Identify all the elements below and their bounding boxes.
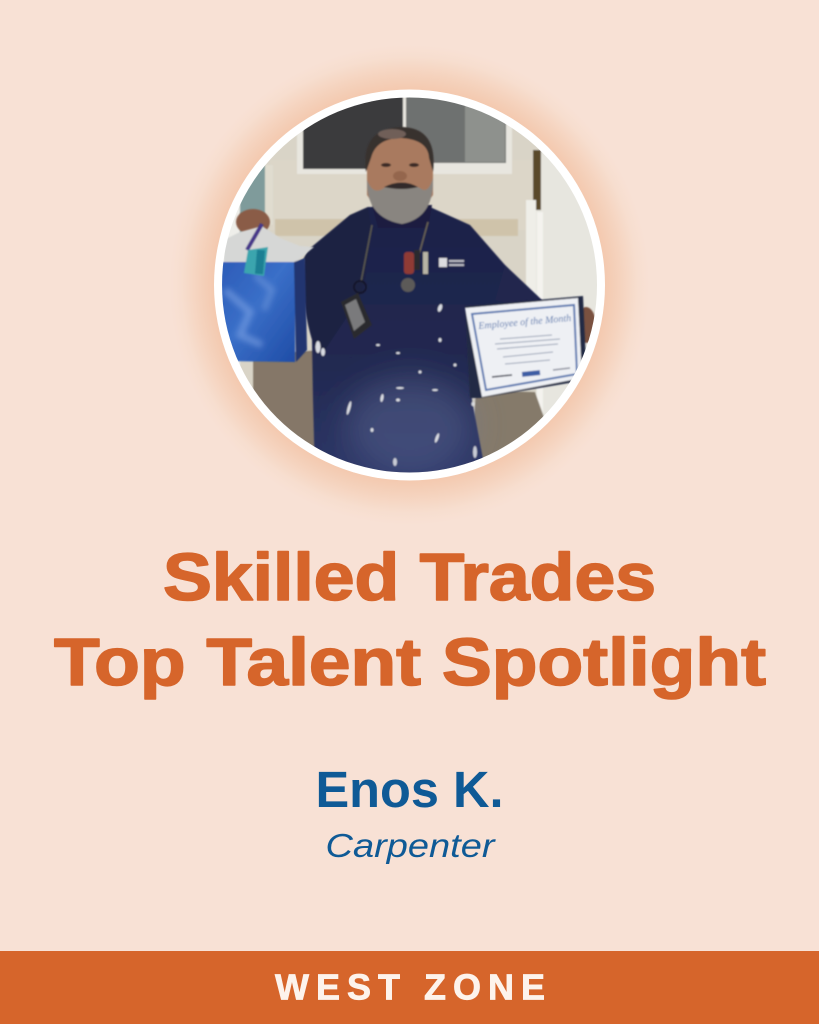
blue border xyxy=(472,305,577,390)
forearm xyxy=(505,265,542,302)
faded paint wash xyxy=(345,375,475,475)
title xyxy=(54,540,766,700)
raised hand xyxy=(236,209,270,235)
certificate xyxy=(465,296,586,398)
paint splatters xyxy=(316,304,477,466)
signatures and logo xyxy=(492,375,512,377)
portrait glow xyxy=(170,45,650,525)
folder xyxy=(465,296,586,398)
bag front xyxy=(221,262,295,362)
zone label: WEST ZONE xyxy=(275,966,545,1008)
head xyxy=(366,137,434,198)
certificate heading: Employee of the Month xyxy=(477,313,572,332)
ledge xyxy=(275,219,518,236)
employee name: Enos K. xyxy=(316,761,504,818)
floor tiles xyxy=(252,350,320,450)
gift bag xyxy=(221,224,314,362)
lanyard xyxy=(361,225,372,282)
keys xyxy=(404,252,414,274)
portrait badge xyxy=(214,90,606,480)
right door and post xyxy=(536,151,597,416)
shirt logo xyxy=(439,258,447,267)
crinkle highlights xyxy=(225,275,272,345)
certificate lines xyxy=(495,335,560,364)
nose xyxy=(393,171,407,181)
badge holder xyxy=(341,293,372,339)
ribbon handle xyxy=(247,224,262,250)
footer band xyxy=(0,951,819,1024)
man xyxy=(236,127,596,478)
neck xyxy=(372,205,432,228)
title line 1: Skilled Trades xyxy=(163,540,656,615)
title line 2: Top Talent Spotlight xyxy=(54,625,766,700)
job title: Carpenter xyxy=(326,827,497,864)
eyes and brows xyxy=(381,163,391,167)
right hand xyxy=(582,306,595,344)
window frame and glass xyxy=(297,92,512,174)
bag side xyxy=(294,258,307,362)
wall xyxy=(240,128,540,472)
tissue paper xyxy=(224,226,314,264)
white ring xyxy=(214,90,605,480)
tag xyxy=(244,247,268,276)
paper xyxy=(465,298,582,397)
photo: employee with gift bag and certificate xyxy=(215,90,606,480)
left teal wall xyxy=(239,165,268,232)
hair xyxy=(365,127,434,172)
darker vest area xyxy=(303,207,372,350)
beard xyxy=(367,178,433,224)
shirt body xyxy=(304,206,506,472)
